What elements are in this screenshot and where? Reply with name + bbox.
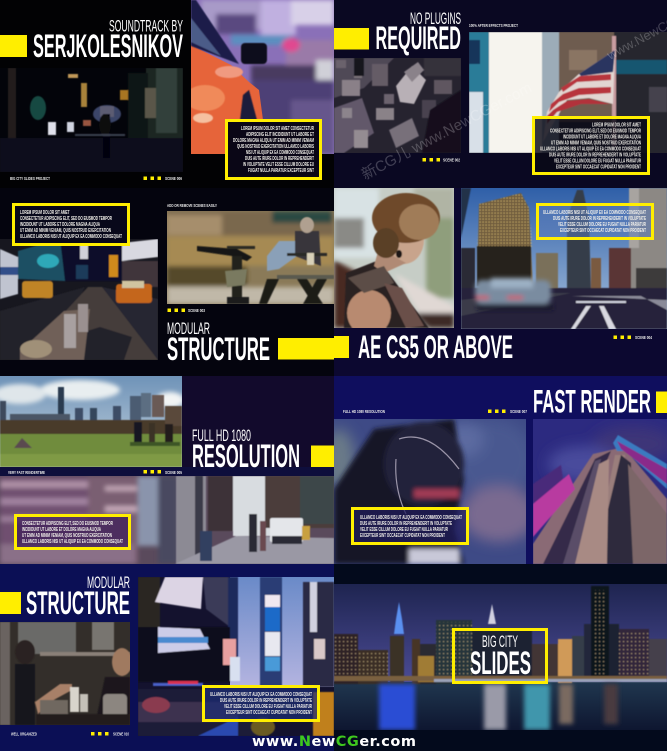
panel: full hd 1080 resolution [0, 376, 334, 564]
heading: structure: STRUCTURE [167, 331, 270, 367]
text box: lorem ipsum: LOREM IPSUM DOLOR SIT AMET [20, 210, 70, 216]
photo: man at cafe table [167, 211, 334, 304]
scene marker: SCENE 004 [635, 335, 652, 340]
watermark: diagonal faint text [359, 8, 667, 184]
watermark: site url: www.NewCGer.com [252, 734, 416, 750]
text box: lorem ipsum: ADIPISCING ELIT INCIDIDUNT UT LABORE ET [246, 132, 314, 138]
photo: dog close-up [334, 419, 526, 564]
text box: lorem ipsum [226, 120, 320, 178]
panel: modular structure [0, 188, 334, 376]
photo: woman profile [334, 188, 454, 328]
text box: lorem ipsum: NISI UT ALIQUIP EX EA COMMODO CONSEQUAT [246, 150, 314, 156]
heading: required: REQUIRED [376, 20, 461, 56]
photo: food stall [0, 622, 130, 725]
heading: modular: MODULAR [167, 319, 210, 338]
text box: consectetur: INCIDIDUNT UT LABORE ET DOLORE MAGNA ALIQUA [22, 527, 101, 533]
text box: ullamco laboris [538, 204, 652, 238]
heading: soundtrack by: SOUNDTRACK BY [109, 16, 183, 36]
text box: ullamco laboris [204, 686, 318, 720]
text box: lorem ipsum: DOLORE MAGNA ALIQUA UT ENIM AD MINIM VENIAM [233, 138, 314, 144]
label: well organized: WELL ORGANIZED [11, 732, 37, 736]
photo: neon tower [533, 419, 667, 564]
scene marker: SCENE 010 [113, 732, 129, 736]
text box: ullamco laboris: EXCEPTEUR SINT OCCAECAT CUPIDATAT NON PROIDENT [360, 533, 445, 539]
text box: ullamco laboris: DUIS AUTE IRURE DOLOR IN REPREHENDERIT IN VOLUPTATE [360, 521, 452, 527]
heading: resolution: RESOLUTION [192, 438, 300, 474]
heading: modular: MODULAR [87, 573, 130, 592]
text box: lorem ipsum: DUIS AUTE IRURE DOLOR IN REPREHENDERIT [245, 156, 314, 162]
label: very fast rendertime: VERY FAST RENDERTIME [8, 470, 45, 475]
text box: lorem ipsum: UT ENIM AD MINIM VENIAM, QUIS NOSTRUD EXERCITATION [20, 228, 111, 234]
text box: consectetur [16, 516, 130, 548]
heading: full hd 1080: FULL HD 1080 [192, 426, 251, 445]
text box: ullamco laboris: VELIT ESSE CILLUM DOLORE EU FUGIAT NULLA PARIATUR [224, 704, 312, 710]
photo: night alley [0, 68, 183, 172]
text box: lorem ipsum [14, 204, 128, 244]
panel: fast render [323, 376, 667, 564]
text box: ullamco laboris: DUIS AUTE IRURE DOLOR IN REPREHENDERIT IN VOLUPTATE [220, 698, 312, 704]
heading: serjkolesnikov: SERJKOLESNIKOV [33, 28, 183, 64]
text box: consectetur: UT ENIM AD MINIM VENIAM, QUIS NOSTRUD EXERCITATION [22, 533, 112, 539]
label: full hd resolution: FULL HD 1080 RESOLUTION [343, 409, 385, 414]
text box: ullamco laboris: VELIT ESSE CILLUM DOLORE EU FUGIAT NULLA PARIATUR [360, 527, 448, 533]
photo: street with truck [0, 476, 334, 564]
text box: ullamco laboris: EXCEPTEUR SINT OCCAECAT CUPIDATAT NON PROIDENT [226, 710, 312, 716]
footer: project label: BIG CITY SLIDES PROJECT [10, 176, 50, 181]
panel: soundtrack by serjkolesnikov [0, 0, 334, 188]
title box: big city slides: BIG CITY [482, 632, 518, 651]
yellow title bar [278, 338, 334, 360]
text box: lorem ipsum: LOREM IPSUM DOLOR SIT AMET CONSECTETUR [241, 126, 314, 132]
watermark: diagonal faint text: 新CG儿 www.NewCGer.com [359, 79, 535, 184]
scene marker: SCENE 005 [165, 470, 182, 475]
text box: lorem ipsum: IN VOLUPTATE VELIT ESSE CILLUM DOLORE EU [243, 162, 314, 168]
yellow title bar [334, 336, 349, 358]
photo: central park skyline [0, 376, 182, 467]
panel: big city slides [334, 564, 667, 751]
photo: times square taxis [0, 239, 158, 360]
scene marker [144, 470, 182, 475]
scene marker [168, 308, 205, 313]
text box: lorem ipsum: ULLAMCO LABORIS NISI UT ALIQUIP EX EA COMMODO CONSEQUAT [20, 234, 122, 240]
panel: ae cs5 or above [334, 188, 667, 376]
footer: scene marker: SCENE 002 [443, 158, 460, 162]
photo: american flag [469, 32, 667, 153]
heading: structure: STRUCTURE [26, 585, 130, 621]
text box: ullamco laboris: ULLAMCO LABORIS NISI UT ALIQUIP EX EA COMMODO CONSEQUAT [210, 692, 312, 698]
scene marker: SCENE 003 [188, 308, 205, 313]
footer: scene marker: SCENE 006 [165, 176, 182, 181]
scene marker [614, 335, 652, 340]
text box: lorem ipsum [534, 118, 648, 174]
label: add or remove scenes: ADD OR REMOVE SCENES EASILY [167, 203, 217, 208]
yellow title bar [334, 28, 369, 50]
text box: ullamco laboris [352, 508, 468, 544]
yellow title bar [0, 35, 27, 57]
title box: big city slides [454, 630, 546, 682]
photo: orange taxi [191, 0, 334, 154]
footer: scene marker [422, 158, 460, 162]
footer: scene marker [144, 176, 182, 181]
heading: slides: SLIDES [470, 645, 531, 681]
yellow title bar [656, 392, 667, 413]
text box: lorem ipsum: CONSECTETUR ADIPISCING ELIT, SED DO EIUSMOD TEMPOR [20, 216, 112, 222]
panel: no plugins required: NO PLUGINS [410, 9, 461, 28]
text box: consectetur: ULLAMCO LABORIS NISI UT ALIQUIP EX EA COMMODO CONSEQUAT [22, 539, 123, 545]
text box: consectetur: CONSECTETUR ADIPISCING ELIT, SED DO EIUSMOD TEMPOR [22, 521, 113, 527]
yellow title bar [311, 446, 334, 467]
heading: ae cs5 or above: AE CS5 OR ABOVE [358, 329, 513, 365]
scene marker [91, 732, 129, 736]
text box: lorem ipsum: INCIDIDUNT UT LABORE ET DOLORE MAGNA ALIQUA [20, 222, 100, 228]
yellow title bar [0, 592, 21, 614]
label: after effects project: 100% AFTER EFFECTS PROJECT [469, 23, 518, 28]
panel: modular structure second [0, 564, 334, 751]
scene marker: SCENE 007 [510, 409, 527, 414]
photo: times square billboards [138, 577, 334, 736]
scene marker [488, 409, 527, 414]
text box: lorem ipsum: FUGIAT NULLA PARIATUR EXCEPTEUR SINT [248, 168, 314, 174]
photo: night skyline over water [334, 584, 667, 730]
photo: flatiron street [461, 188, 667, 329]
text box: ullamco laboris: ULLAMCO LABORIS NISI UT ALIQUIP EX EA COMMODO CONSEQUAT [360, 515, 462, 521]
photo: aerial city [334, 58, 461, 153]
panel: no plugins required [334, 0, 667, 188]
text box: lorem ipsum: QUIS NOSTRUD EXERCITATION ULLAMCO LABORIS [237, 144, 314, 150]
